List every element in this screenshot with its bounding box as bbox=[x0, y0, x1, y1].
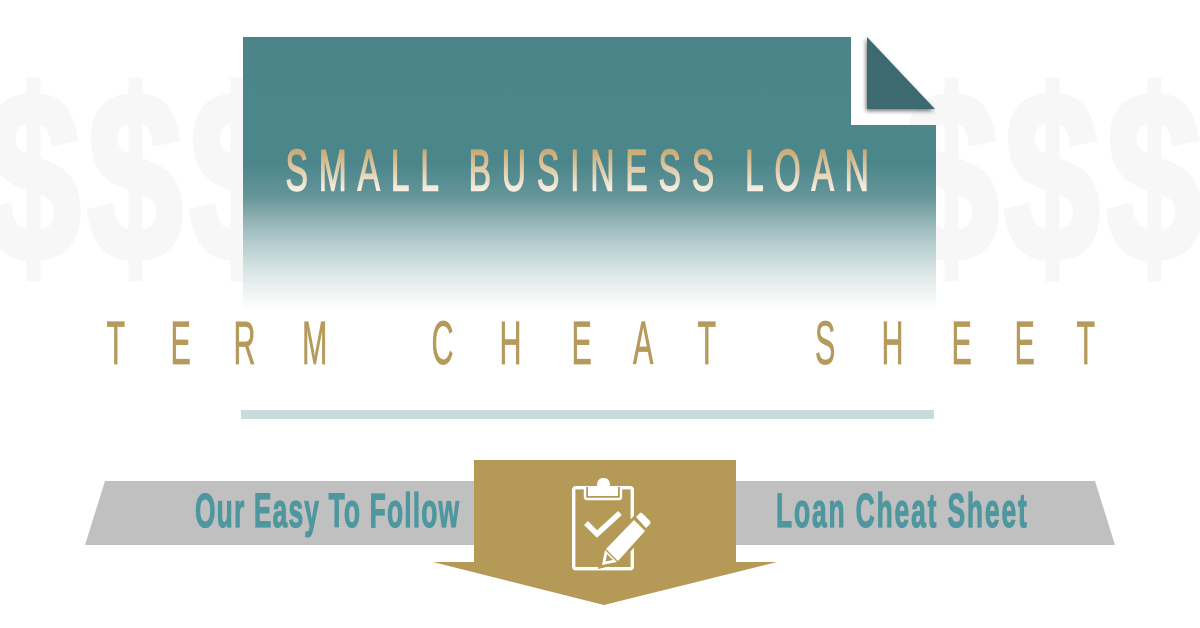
background dollar signs bbox=[0, 43, 1200, 312]
icon: clipboard with check and pencil bbox=[574, 478, 651, 569]
panel: teal document with notched corner bbox=[243, 37, 936, 312]
dollar sign left 2: $ bbox=[87, 43, 183, 312]
heading: term cheat sheet: TERM CHEAT SHEET bbox=[106, 310, 1095, 378]
divider rule bbox=[241, 410, 934, 419]
banner: grey ribbon bbox=[85, 481, 1115, 545]
dollar sign right 2: $ bbox=[1004, 43, 1100, 312]
dollar sign left 3: $ bbox=[189, 43, 285, 312]
arrow: gold down arrow bbox=[433, 460, 777, 605]
dollar sign right 3: $ bbox=[1106, 43, 1200, 312]
dollar sign right 1: $ bbox=[903, 43, 999, 312]
icon: folded page corner bbox=[867, 37, 935, 109]
banner text right: Loan Cheat Sheet bbox=[776, 485, 1027, 538]
banner text left: Our Easy To Follow bbox=[195, 485, 460, 538]
heading: small business loan: SMALL BUSINESS LOAN bbox=[286, 139, 869, 204]
